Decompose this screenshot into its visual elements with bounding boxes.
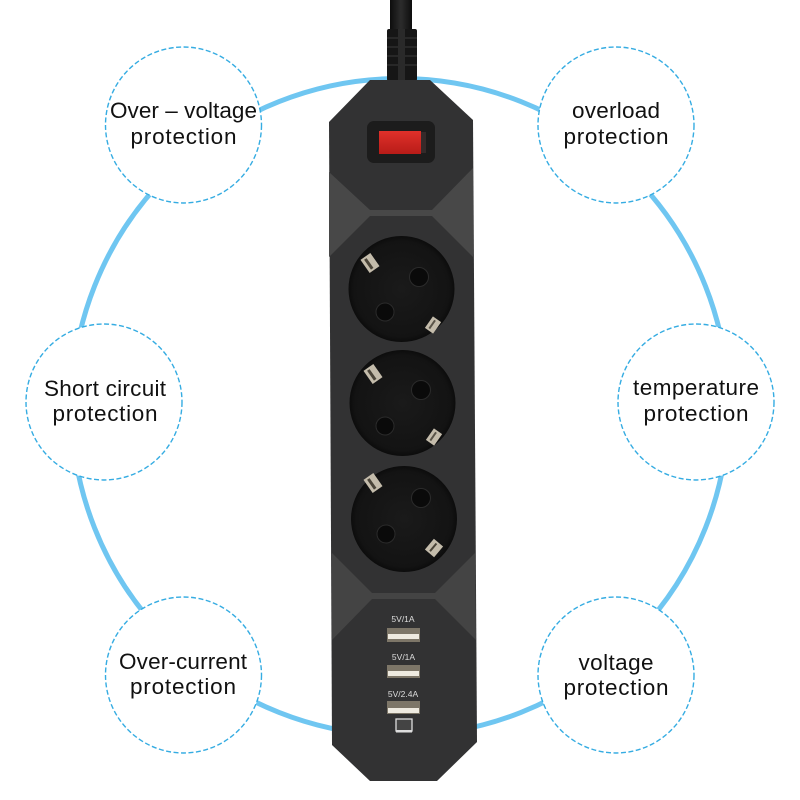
USB port 5V/1A top <box>387 614 420 642</box>
circle: voltage protection: voltage <box>578 650 654 675</box>
lower facet band <box>332 553 476 640</box>
socket 2 <box>350 350 456 456</box>
circle: Short circuit protection: Short circuit <box>44 376 167 401</box>
circle: Short circuit protection <box>26 324 182 480</box>
circle: Short circuit protection: protection <box>52 401 158 426</box>
rocker switch <box>367 121 435 163</box>
circle: Over-current protection: Over-current <box>119 649 248 674</box>
circle: temperature protection: temperature <box>633 375 759 400</box>
circle: overload protection: protection <box>564 124 668 149</box>
circle: Over-current protection <box>106 597 262 753</box>
circle: Over-voltage protection: Over – voltage <box>110 98 257 123</box>
circle: overload protection <box>538 47 694 203</box>
USB port 5V/1A middle <box>387 652 420 678</box>
power strip body <box>329 80 477 781</box>
circle: voltage protection <box>538 597 694 753</box>
circle: voltage protection: protection <box>564 675 668 700</box>
circle: temperature protection <box>618 324 774 480</box>
socket 3 <box>351 466 457 572</box>
blue connecting ring <box>72 78 728 736</box>
USB port 5V/1A middle: 5V/1A <box>392 652 415 662</box>
circle: Over-voltage protection: protection <box>130 124 236 149</box>
USB port 5V/2.4A: 5V/2.4A <box>388 689 418 699</box>
socket 1 <box>348 236 454 342</box>
USB port 5V/2.4A <box>387 689 420 714</box>
USB port 5V/1A top: 5V/1A <box>391 614 415 624</box>
upper facet band <box>329 168 473 257</box>
circle: Over-current protection: protection <box>130 674 236 699</box>
power cord <box>387 0 417 81</box>
circle: temperature protection: protection <box>644 401 748 426</box>
icon: tablet <box>396 719 412 732</box>
circle: overload protection: overload <box>572 98 660 123</box>
circle: Over-voltage protection <box>106 47 262 203</box>
